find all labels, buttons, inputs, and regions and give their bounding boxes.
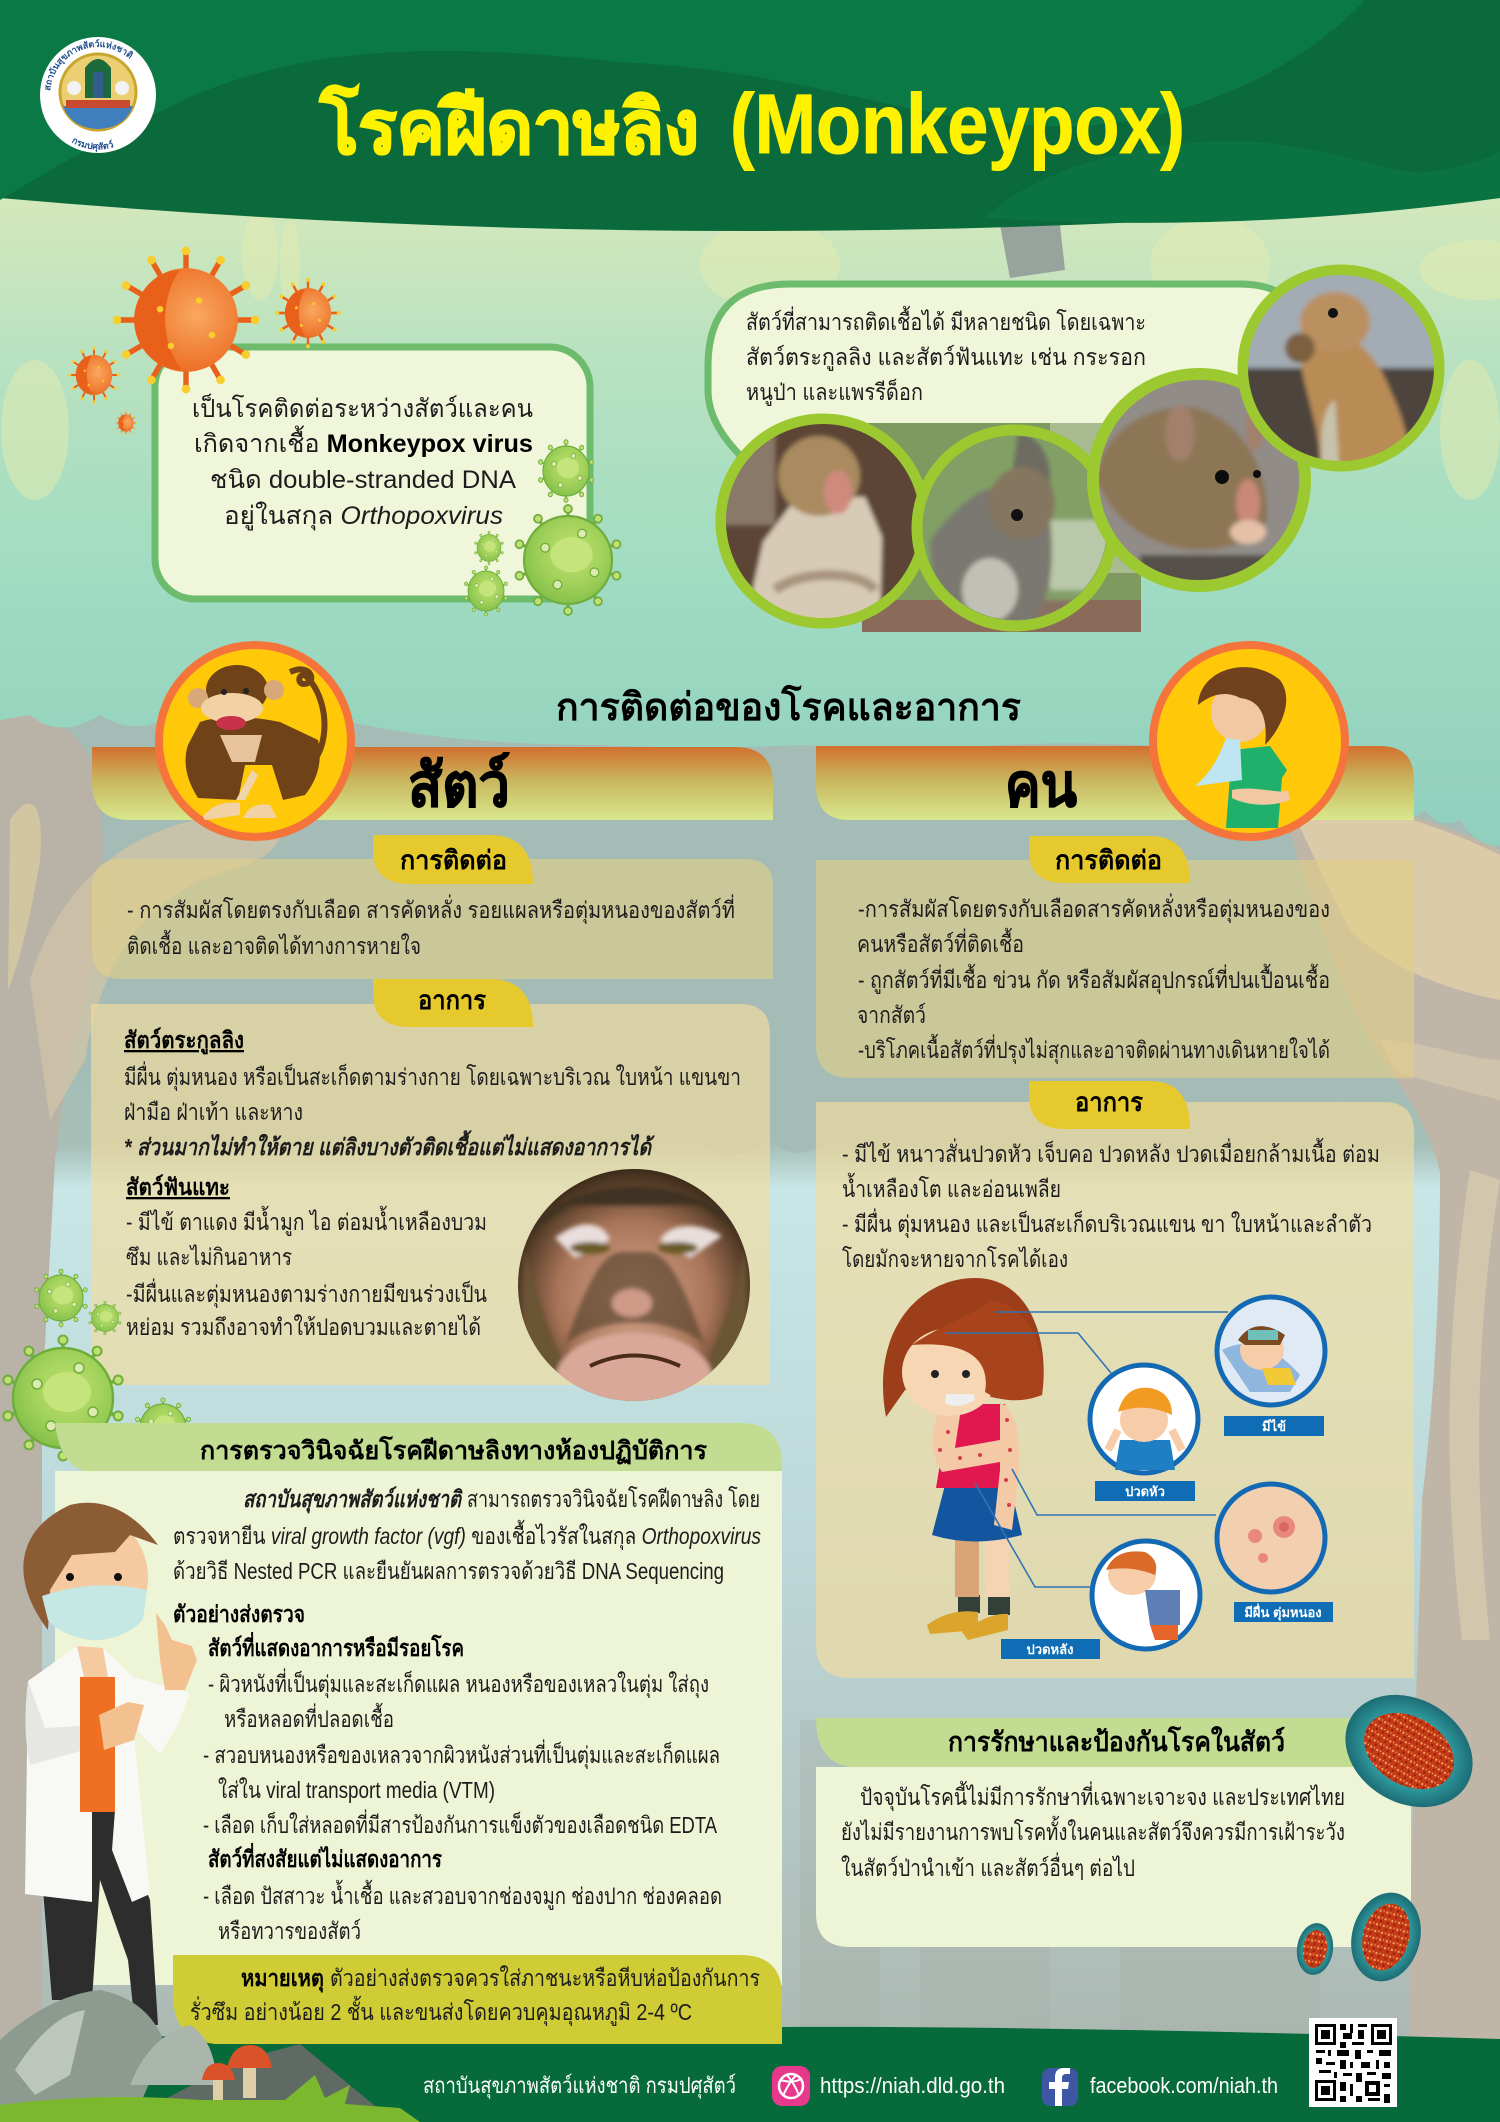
lab header: การตรวจวินิจฉัยโรคฝีดาษลิงทางห้องปฏิบัติการ: [200, 1435, 708, 1465]
lab text: หรือทวารของสัตว์: [218, 1918, 361, 1944]
label: rash: มีผื่น ตุ่มหนอง: [1244, 1603, 1322, 1621]
human transmission text: จากสัตว์: [857, 1002, 926, 1028]
human symptoms text: น้ำเหลืองโต และอ่อนเพลีย: [842, 1173, 1061, 1202]
tag: human transmission: การติดต่อ: [1055, 845, 1162, 875]
photo: infected monkey face: [518, 1169, 750, 1424]
title: (Monkeypox): [730, 77, 1185, 171]
illustration: doctor: [23, 1503, 197, 2025]
panel: animals symptoms: [91, 1004, 770, 1385]
icon: rash closeup: [1217, 1484, 1325, 1592]
footer band: [0, 2027, 1500, 2122]
title: โรคฝีดาษลิง: [319, 84, 699, 169]
lab text: ตรวจหายีน viral growth factor (vgf) ของเชื้อไวรัสในสกุล Orthopoxvirus: [173, 1520, 761, 1550]
treatment header: [816, 1718, 1411, 1767]
callout lines: symptoms: [945, 1312, 1228, 1587]
label: fever: มีไข้: [1262, 1418, 1286, 1434]
animals symptoms text: สัตว์ฟันแทะ: [126, 1174, 230, 1200]
treatment text: ปัจจุบันโรคนี้ไม่มีการรักษาที่เฉพาะเจาะจง และประเทศไทย: [860, 1781, 1345, 1811]
transmission text: ติดเชื้อ และอาจติดได้ทางการหายใจ: [127, 930, 421, 959]
animals symptoms text: * ส่วนมากไม่ทำให้ตาย แต่ลิงบางตัวติดเชื้อแต่ไม่แสดงอาการได้: [124, 1130, 655, 1160]
label: rash: [1234, 1602, 1333, 1622]
lab text: - เลือด ปัสสาวะ น้ำเชื้อ และสวอบจากช่องจมูก ช่องปาก ช่องคลอด: [203, 1880, 722, 1910]
intro text: เกิดจากเชื้อ Monkeypox virus: [194, 425, 533, 458]
logo: institute seal: [40, 37, 156, 153]
susceptible animals text: สัตว์ที่สามารถติดเชื้อได้ มีหลายชนิด โดยเฉพาะ: [746, 306, 1146, 335]
icon: facebook: [1042, 2068, 1078, 2106]
icon: back pain: [1092, 1541, 1200, 1649]
footer: facebook: facebook.com/niah.th: [1090, 2073, 1278, 2098]
photo: prairie dog: [1240, 265, 1445, 480]
photo: monkey: [715, 415, 930, 630]
animals symptoms text: - มีไข้ ตาแดง มีน้ำมูก ไอ ต่อมน้ำเหลืองบวม: [126, 1206, 487, 1236]
tag: animals symptoms: อาการ: [418, 985, 486, 1015]
lab text: - เลือด เก็บใส่หลอดที่มีสารป้องกันการแข็งตัวของเลือดชนิด EDTA: [203, 1809, 718, 1838]
lab text: - สวอบหนองหรือของเหลวจากผิวหนังส่วนที่เป็นตุ่มและสะเก็ดแผล: [203, 1739, 720, 1769]
animals symptoms text: หย่อม รวมถึงอาจทำให้ปอดบวมและตายได้: [126, 1314, 481, 1340]
photo: squirrel backdrop: [862, 423, 1141, 632]
lab text: - ผิวหนังที่เป็นตุ่มและสะเก็ดแผล หนองหรือของเหลวในตุ่ม ใส่ถุง: [208, 1668, 709, 1698]
panel: animals transmission: [92, 859, 773, 979]
note box: หมายเหตุ: [241, 1965, 324, 1993]
logo: institute seal: สถาบันสุขภาพสัตว์แห่งชาติ: [45, 38, 134, 90]
human symptoms text: โดยมักจะหายจากโรคได้เอง: [842, 1246, 1068, 1272]
panel: human symptoms: [816, 1102, 1414, 1678]
icon: monkeypox virion small: [1294, 1921, 1336, 1977]
illustration: rocks, mushrooms and grass: [0, 1990, 420, 2122]
lab text: สัตว์ที่แสดงอาการหรือมีรอยโรค: [208, 1631, 464, 1661]
human symptoms text: - มีผื่น ตุ่มหนอง และเป็นสะเก็ดบริเวณแขน ขา ใบหน้าและลำตัว: [842, 1208, 1372, 1238]
heading: human: คน: [1005, 752, 1077, 819]
icon: sick boy badge: [1153, 645, 1345, 837]
tag: animals symptoms: [373, 979, 533, 1027]
icon: green viruses (left): [2, 1269, 191, 1460]
panel: treatment and prevention: [816, 1718, 1411, 1947]
photo: mouse: [1090, 374, 1310, 590]
label: fever: [1224, 1416, 1324, 1436]
human transmission text: [857, 893, 1330, 1064]
tag: human symptoms: อาการ: [1075, 1087, 1143, 1117]
transmission text: - การสัมผัสโดยตรงกับเลือด สารคัดหลั่ง รอยแผลหรือตุ่มหนองของสัตว์ที่: [127, 894, 735, 924]
animals symptoms text: ซึม และไม่กินอาหาร: [126, 1244, 292, 1270]
treatment header: การรักษาและป้องกันโรคในสัตว์: [948, 1725, 1285, 1757]
susceptible animals text: สัตว์ตระกูลลิง และสัตว์ฟันแทะ เช่น กระรอก: [746, 344, 1146, 371]
icon: website: [772, 2066, 810, 2106]
intro text: [192, 393, 533, 531]
treatment text: [841, 1781, 1345, 1881]
label: headache: [1095, 1481, 1195, 1501]
icon: fever: [1217, 1297, 1325, 1405]
animals symptoms text: [124, 1027, 741, 1340]
lab text: หรือหลอดที่ปลอดเชื้อ: [224, 1703, 394, 1732]
panel: susceptible animals: [708, 284, 1300, 500]
human transmission text: -การสัมผัสโดยตรงกับเลือดสารคัดหลั่งหรือตุ่มหนองของ: [858, 893, 1330, 923]
treatment text: ในสัตว์ป่านำเข้า และสัตว์อื่นๆ ต่อไป: [841, 1852, 1135, 1881]
icon: monkeypox virion large: [1325, 1672, 1493, 1830]
panel: animals banner: [92, 747, 773, 820]
animals symptoms text: สัตว์ตระกูลลิง: [124, 1027, 244, 1055]
human symptoms text: [842, 1138, 1380, 1272]
treatment text: ยังไม่มีรายงานการพบโรคทั้งในคนและสัตว์จึงควรมีการเฝ้าระวัง: [841, 1816, 1345, 1845]
human transmission text: - ถูกสัตว์ที่มีเชื้อ ข่วน กัด หรือสัมผัสอุปกรณ์ที่ปนเปื้อนเชื้อ: [858, 964, 1330, 994]
human transmission text: -บริโภคเนื้อสัตว์ที่ปรุงไม่สุกและอาจติดผ่านทางเดินหายใจได้: [858, 1034, 1330, 1064]
label: headache: ปวดหัว: [1125, 1484, 1165, 1499]
footer: website: https://niah.dld.go.th: [820, 2073, 1005, 2098]
human symptoms text: - มีไข้ หนาวสั่นปวดหัว เจ็บคอ ปวดหลัง ปวดเมื่อยกล้ามเนื้อ ต่อม: [842, 1138, 1380, 1167]
susceptible animals text: [746, 306, 1146, 406]
animals symptoms text: -มีผื่นและตุ่มหนองตามร่างกายมีขนร่วงเป็น: [126, 1278, 487, 1308]
title: [319, 77, 1185, 171]
heading: animals: สัตว์: [408, 752, 510, 819]
animals symptoms text: มีผื่น ตุ่มหนอง หรือเป็นสะเก็ดตามร่างกาย โดยเฉพาะบริเวณ ใบหน้า แขนขา: [124, 1061, 741, 1091]
lab text: [173, 1486, 761, 1944]
illustration: sick girl: [883, 1278, 1044, 1640]
icon: green viruses (intro panel): [464, 440, 622, 616]
lab text: สามารถตรวจวินิจฉัยโรคฝีดาษลิง โดย: [467, 1486, 760, 1512]
icon: orange viruses: [68, 247, 341, 435]
lab text: ใส่ใน viral transport media (VTM): [218, 1777, 495, 1803]
panel: human transmission: [816, 860, 1414, 1078]
lab text: ด้วยวิธี Nested PCR และยืนยันผลการตรวจด้วยวิธี DNA Sequencing: [173, 1558, 724, 1584]
label: back pain: ปวดหลัง: [1027, 1642, 1073, 1657]
lab text: สัตว์ที่สงสัยแต่ไม่แสดงอาการ: [208, 1842, 443, 1872]
intro text: ชนิด double-stranded DNA: [210, 466, 516, 494]
lab text: สถาบันสุขภาพสัตว์แห่งชาติ: [243, 1486, 463, 1514]
tag: human transmission: [1029, 836, 1190, 883]
lab header: [55, 1423, 782, 1471]
transmission text: [127, 894, 735, 959]
header band: [0, 0, 1500, 231]
icon: headache: [1090, 1365, 1198, 1473]
QR code: [1309, 2018, 1397, 2107]
tag: human symptoms: [1029, 1081, 1190, 1129]
section heading: การติดต่อของโรคและอาการ: [556, 684, 1022, 729]
susceptible animals text: หนูป่า และแพรรีด็อก: [746, 377, 923, 406]
photo: squirrel: [915, 425, 1125, 640]
animals symptoms text: ฝ่ามือ ฝ่าเท้า และหาง: [124, 1099, 303, 1125]
note box: ตัวอย่างส่งตรวจควรใส่ภาชนะหรือหีบห่อป้องกันการ: [330, 1965, 760, 1991]
panel: human banner: [816, 746, 1414, 820]
label: back pain: [1001, 1639, 1100, 1659]
icon: monkeypox virion medium: [1342, 1885, 1430, 1989]
note box: [173, 1955, 782, 2044]
lab text: ตัวอย่างส่งตรวจ: [173, 1601, 305, 1627]
footer: institute name: สถาบันสุขภาพสัตว์แห่งชาติ กรมปศุสัตว์: [423, 2073, 736, 2099]
intro text: อยู่ในสกุล Orthopoxvirus: [224, 501, 503, 531]
human transmission text: คนหรือสัตว์ที่ติดเชื้อ: [857, 928, 1024, 957]
panel: lab diagnosis: [55, 1423, 782, 1985]
tag: animals transmission: [373, 835, 533, 884]
note box: รั่วซึม อย่างน้อย 2 ชั้น และขนส่งโดยควบคุมอุณหภูมิ 2-4 ºC: [190, 1996, 692, 2026]
tag: animals transmission: การติดต่อ: [400, 845, 507, 875]
intro text: เป็นโรคติดต่อระหว่างสัตว์และคน: [192, 393, 533, 423]
logo: institute seal: กรมปศุสัตว์: [72, 138, 114, 152]
icon: monkey badge: [159, 645, 351, 837]
panel: intro: [155, 347, 590, 599]
